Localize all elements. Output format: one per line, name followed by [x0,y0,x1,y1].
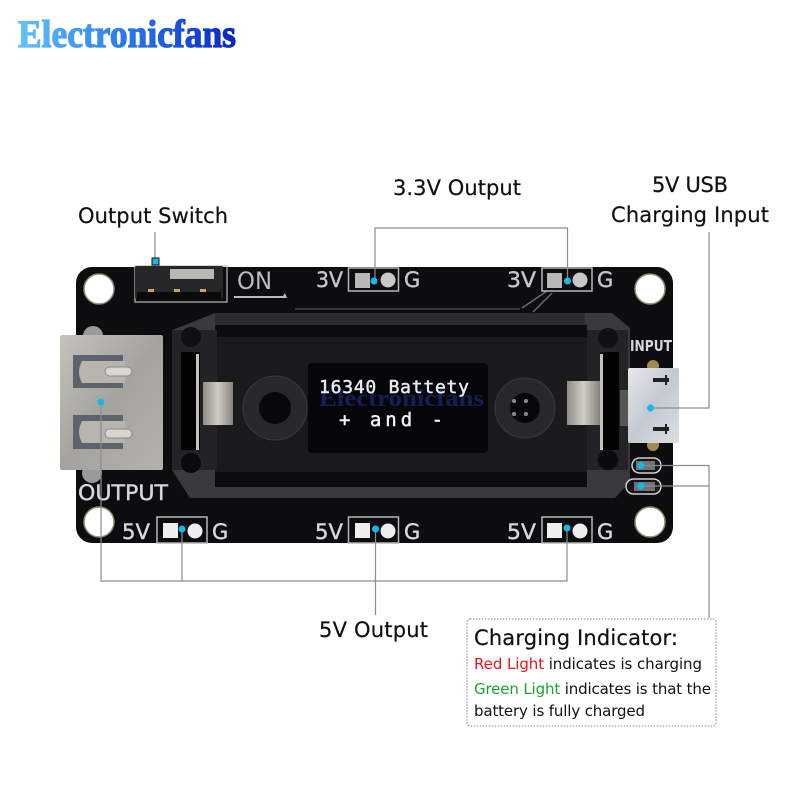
holder frame [172,313,630,498]
battery label panel: Electronicfans [319,386,484,412]
label: Charging Input: Charging Input [611,203,769,227]
callout line: battery charged: battery is fully charged [474,702,645,720]
micro USB input port [620,360,679,451]
holder left circle [243,376,307,440]
holder top rail [215,313,585,325]
5V pin header left: G [212,520,228,544]
right contact slot [567,328,628,470]
holder cavity [215,325,587,487]
battery label panel [308,363,488,453]
silkscreen: OUTPUT: OUTPUT [78,481,168,505]
5V pin header right: G [597,520,613,544]
circuit board [60,266,679,544]
charging LEDs [626,458,661,494]
battery label panel: + and - [339,409,443,431]
label: 3.3V Output: 3.3V Output [393,176,521,200]
5V pin header middle: 5V [315,520,344,544]
3V pin header left [316,268,420,292]
3V pin header right: 3V [507,268,537,292]
5V pin header middle [315,517,420,544]
mounting holes [84,274,665,537]
silkscreen: ON marker [234,267,287,298]
board body [76,267,673,543]
label: Output Switch: Output Switch [78,204,228,228]
5V pin header middle: G [404,520,420,544]
3V pin header right: G [597,268,613,292]
5V pin header left: 5V [122,520,151,544]
label: 5V Output: 5V Output [319,618,428,642]
logo: Electronicfans: Electronicfans [18,13,236,56]
battery holder [172,313,630,498]
silkscreen traces [295,291,552,312]
USB-A output port [60,326,163,483]
silkscreen: ON marker: ON [237,267,272,295]
callout box [467,619,716,726]
holder right circle [495,378,555,438]
5V pin header right [507,517,613,544]
output switch [135,266,227,302]
silkscreen: INPUT: INPUT [630,337,672,355]
callout line: green light: Green Light indicates is that the [474,680,711,698]
5V pin header right: 5V [507,520,537,544]
callout heading: Charging Indicator: [474,626,678,650]
3V pin header right [507,268,613,292]
3V pin header left: 3V [316,268,344,292]
label: 5V USB: 5V USB [652,173,728,197]
left contact slot [172,327,233,473]
callout: charging indicator [467,619,716,726]
callout line: red light: Red Light indicates is charging [474,655,702,673]
marker dots [98,258,654,532]
3V pin header left: G [404,268,420,292]
5V pin header left [122,517,228,544]
leader lines [101,228,709,618]
battery label panel: 16340 Battety [319,377,469,398]
